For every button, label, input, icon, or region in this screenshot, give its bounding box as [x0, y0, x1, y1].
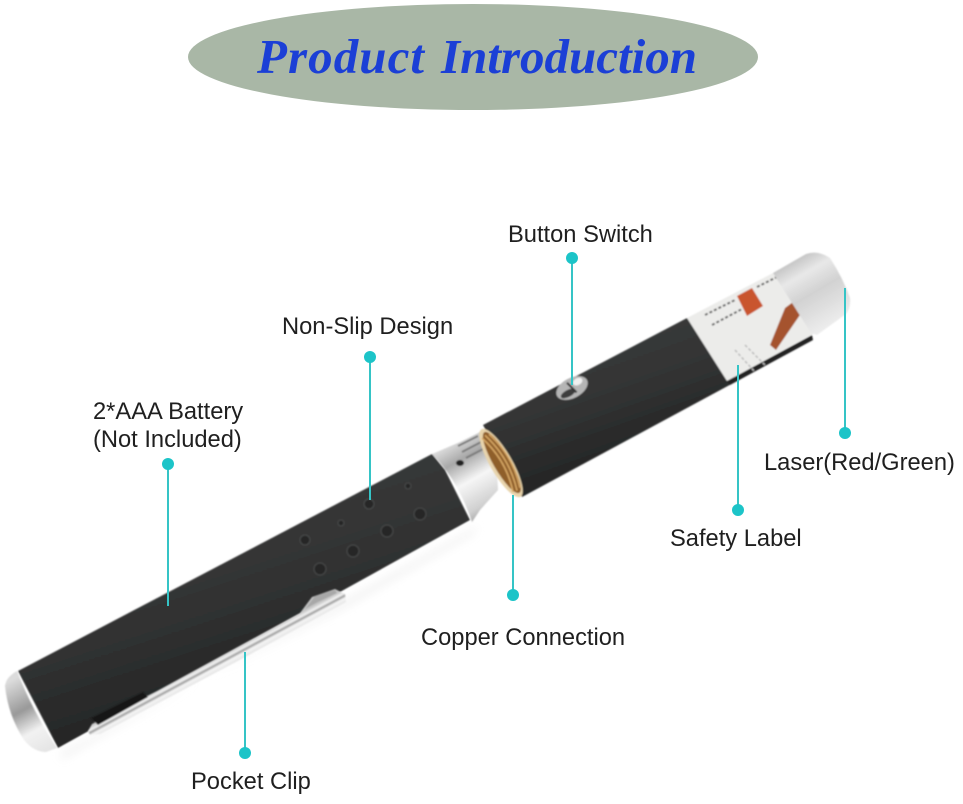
threaded silver collar [432, 432, 498, 522]
callout: Non-Slip Design [282, 314, 453, 500]
callout: Safety Label: Safety Label [670, 526, 802, 552]
non-slip dots [300, 483, 426, 575]
end cap [5, 671, 57, 752]
callout: Copper Connection [421, 495, 625, 651]
callout: Button Switch [508, 222, 653, 385]
callout: 2*AAA Battery: 2*AAA Battery [93, 399, 243, 425]
lower barrel [18, 454, 470, 748]
callout: 2*AAA Battery: (Not Included) [93, 427, 242, 453]
metal laser tip [773, 253, 850, 335]
callout: Non-Slip Design: Non-Slip Design [282, 314, 453, 340]
title badge: Introduction [440, 29, 697, 84]
pocket clip [88, 589, 346, 735]
title badge [188, 4, 758, 110]
callout: Pocket Clip [191, 652, 311, 795]
callout: Laser [764, 288, 955, 476]
laser pointer: upper body [472, 253, 850, 502]
callout: Button Switch: Button Switch [508, 222, 653, 248]
upper barrel [483, 318, 737, 497]
title badge: Product [256, 29, 425, 84]
laser pointer: lower body [5, 432, 498, 760]
callout: Copper Connection: Copper Connection [421, 625, 625, 651]
callout: Pocket Clip: Pocket Clip [191, 769, 311, 795]
callout: Safety Label [670, 365, 802, 552]
callout: Laser: Laser(Red/Green) [764, 450, 955, 476]
button switch [552, 371, 592, 405]
copper connection ring [472, 424, 530, 502]
callout: 2*AAA Battery [93, 399, 243, 606]
safety label sticker [687, 273, 815, 385]
